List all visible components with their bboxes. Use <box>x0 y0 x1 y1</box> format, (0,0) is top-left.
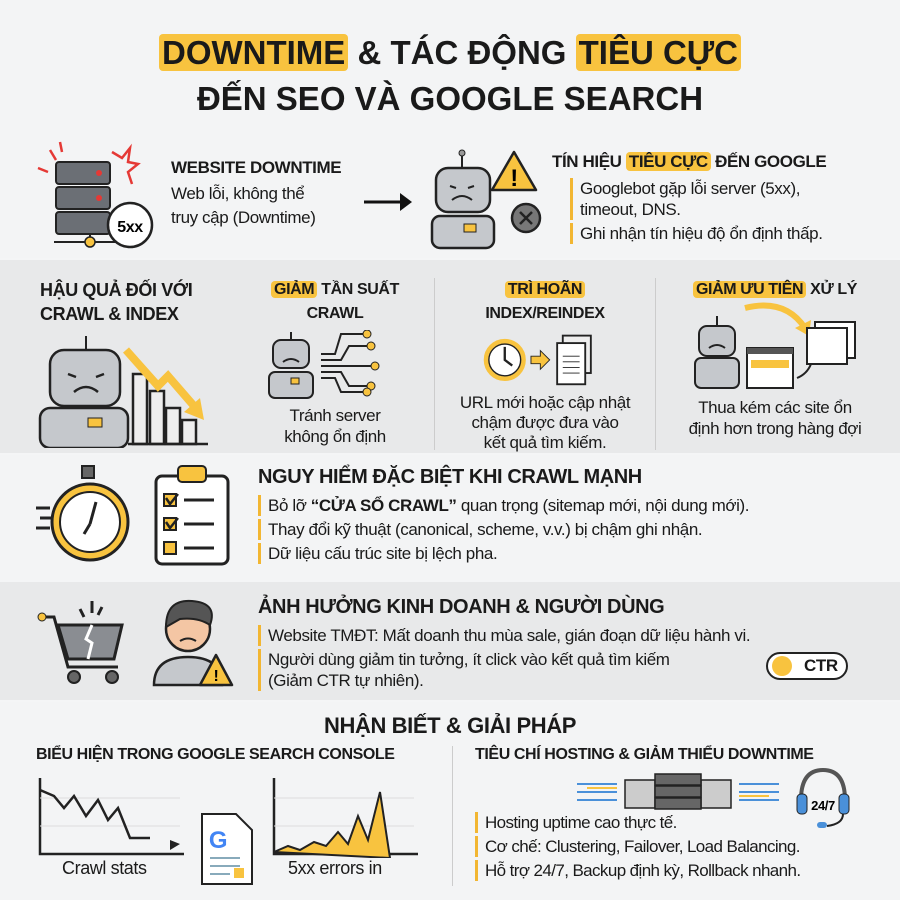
icon: stopwatch <box>36 465 130 562</box>
icon: broken cart <box>38 601 124 684</box>
panel: hosting criteria: Cơ chế: Clustering, Failover, Load Balancing. <box>485 837 800 856</box>
website downtime text: truy cập (Downtime) <box>171 208 316 227</box>
website downtime text: WEBSITE DOWNTIME <box>171 158 341 177</box>
column: delay index: TRÌ HOÃN <box>508 281 582 298</box>
column: delay index: chậm được đưa vào <box>471 413 619 432</box>
negative signal text: TÍN HIỆU TIÊU CỰC ĐẾN GOOGLE <box>552 152 826 171</box>
icon: sad robot with warning: ! <box>510 165 518 192</box>
section: danger when crawling: Dữ liệu cấu trúc site bị lệch pha. <box>268 544 497 563</box>
column: delay index: INDEX/REINDEX <box>485 305 605 322</box>
column: delay index <box>434 278 656 450</box>
heading <box>40 279 192 324</box>
section: business & users: Người dùng giảm tin tưởng, ít click vào kết quả tìm kiếm <box>268 650 670 669</box>
section: danger when crawling: NGUY HIỂM ĐẶC BIỆT KHI CRAWL MẠNH <box>258 466 642 488</box>
icon: server 5xx: 5xx <box>117 219 143 236</box>
chart: crawl stats <box>38 778 184 856</box>
heading: HẬU QUẢ ĐỐI VỚI <box>40 280 192 300</box>
arrow <box>364 193 412 211</box>
website downtime text: Web lỗi, không thể <box>171 184 304 203</box>
section: danger when crawling: Bỏ lỡ “CỬA SỔ CRAWL” quan trọng (sitemap mới, nội dung mới). <box>268 496 749 515</box>
icon: robot with falling chart <box>38 336 208 448</box>
column: reduce crawl frequency: CRAWL <box>307 305 363 322</box>
icon: server cluster <box>577 773 779 810</box>
section: business & users: Website TMĐT: Mất doanh thu mùa sale, gián đoạn dữ liệu hành vi. <box>268 626 750 645</box>
column: reduce priority: định hơn trong hàng đợi <box>689 419 861 438</box>
column: reduce crawl frequency <box>268 280 400 446</box>
section: business & users: (Giảm CTR tự nhiên). <box>268 671 423 690</box>
column: reduce crawl frequency: GIẢM TẦN SUẤT <box>274 281 399 298</box>
icon: checklist <box>154 465 230 566</box>
panel: search console: Crawl stats <box>62 858 147 878</box>
icon: CTR badge <box>766 652 848 680</box>
icon: 24/7 headset: 24/7 <box>811 798 835 813</box>
icon: worried user <box>152 600 234 686</box>
negative signal text <box>552 152 826 244</box>
icon: 24/7 headset <box>796 768 850 828</box>
title <box>159 34 741 117</box>
negative signal text: timeout, DNS. <box>580 200 681 219</box>
website downtime text <box>171 158 341 227</box>
section: business & users: ẢNH HƯỞNG KINH DOANH & NGƯỜI DÙNG <box>258 596 664 618</box>
column: reduce priority <box>689 280 861 438</box>
icon: CTR badge: CTR <box>804 656 838 675</box>
section: danger when crawling: Thay đổi kỹ thuật (canonical, scheme, v.v.) bị chậm ghi nhận. <box>268 520 702 539</box>
panel: search console: 5xx errors in <box>288 858 382 878</box>
panel: hosting criteria: Hosting uptime cao thực tế. <box>485 813 677 832</box>
column: reduce crawl frequency: Tránh server <box>290 406 380 425</box>
icon: worried user: ! <box>214 668 218 685</box>
column: delay index: kết quả tìm kiếm. <box>484 433 606 452</box>
heading: CRAWL & INDEX <box>40 304 178 324</box>
panel: hosting criteria: TIÊU CHÍ HOSTING & GIẢM THIỂU DOWNTIME <box>475 746 814 763</box>
negative signal text: Ghi nhận tín hiệu độ ổn định thấp. <box>580 224 823 243</box>
panel: hosting criteria <box>452 746 892 886</box>
panel: hosting criteria: Hỗ trợ 24/7, Backup định kỳ, Rollback nhanh. <box>485 861 800 880</box>
title: ĐẾN SEO VÀ GOOGLE SEARCH <box>197 80 703 117</box>
column: reduce crawl frequency: không ổn định <box>284 427 386 446</box>
icon: google doc: G <box>209 827 227 854</box>
column: reduce priority: GIẢM ƯU TIÊN XỬ LÝ <box>696 281 857 298</box>
panel: crawl & index consequences <box>38 278 861 452</box>
panel: search console: BIỂU HIỆN TRONG GOOGLE SEARCH CONSOLE <box>36 746 395 763</box>
column: reduce priority: Thua kém các site ổn <box>698 398 852 417</box>
section: danger when crawling <box>258 464 749 564</box>
heading: recognition & solutions: NHẬN BIẾT & GIẢI PHÁP <box>324 713 576 738</box>
panel: search console <box>36 744 418 885</box>
icon: sad robot with warning <box>430 150 542 250</box>
band backgrounds <box>0 0 900 258</box>
icon: server 5xx <box>38 142 154 248</box>
section: business & users <box>258 594 750 691</box>
negative signal text: Googlebot gặp lỗi server (5xx), <box>580 179 800 198</box>
column: delay index: URL mới hoặc cập nhật <box>460 393 630 412</box>
icon: google doc <box>201 813 253 885</box>
chart: 5xx errors <box>272 778 418 858</box>
title: DOWNTIME & TÁC ĐỘNG TIÊU CỰC <box>162 34 738 71</box>
